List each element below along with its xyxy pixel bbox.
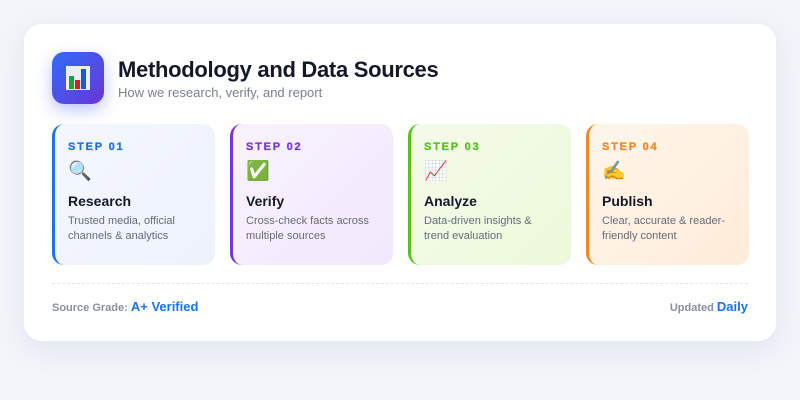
panel: step 02: STEP 02 (246, 141, 302, 153)
panel: step 01 (52, 124, 215, 265)
panel: step 03: Analyze (424, 193, 477, 209)
panel: step 01: 🔍 (68, 160, 92, 182)
panel: step 02 (230, 124, 393, 265)
panel: step 04: friendly content (602, 230, 677, 242)
panel: step 01: Trusted media, official (68, 215, 175, 227)
panel: step 04: STEP 04 (602, 141, 658, 153)
panel: step 03 (408, 124, 571, 265)
panel: step 01: Research (68, 193, 131, 209)
footer: source grade: Source Grade: A+ Verified (52, 299, 198, 314)
panel: step 01: STEP 01 (68, 141, 124, 153)
panel: step 02: Cross-check facts across (246, 215, 369, 227)
footer: updated: Updated Daily (670, 299, 748, 314)
title: Methodology and Data Sources (118, 57, 438, 82)
main card (24, 24, 776, 341)
panel: step 02: Verify (246, 193, 284, 209)
panel: step 03: trend evaluation (424, 230, 502, 242)
panel: step 02: ✅ (246, 160, 270, 182)
subtitle: How we research, verify, and report (118, 85, 322, 100)
panel: step 01: channels & analytics (68, 230, 168, 242)
panel: step 04: Clear, accurate & reader- (602, 215, 725, 227)
panel: step 02: multiple sources (246, 230, 325, 242)
icon: chart (52, 52, 104, 104)
panel: step 04: ✍️ (602, 160, 626, 182)
panel: step 03: STEP 03 (424, 141, 480, 153)
panel: step 03: Data-driven insights & (424, 215, 532, 227)
panel: step 04: Publish (602, 193, 653, 209)
panel: step 04 (586, 124, 749, 265)
panel: step 03: 📈 (424, 160, 448, 182)
